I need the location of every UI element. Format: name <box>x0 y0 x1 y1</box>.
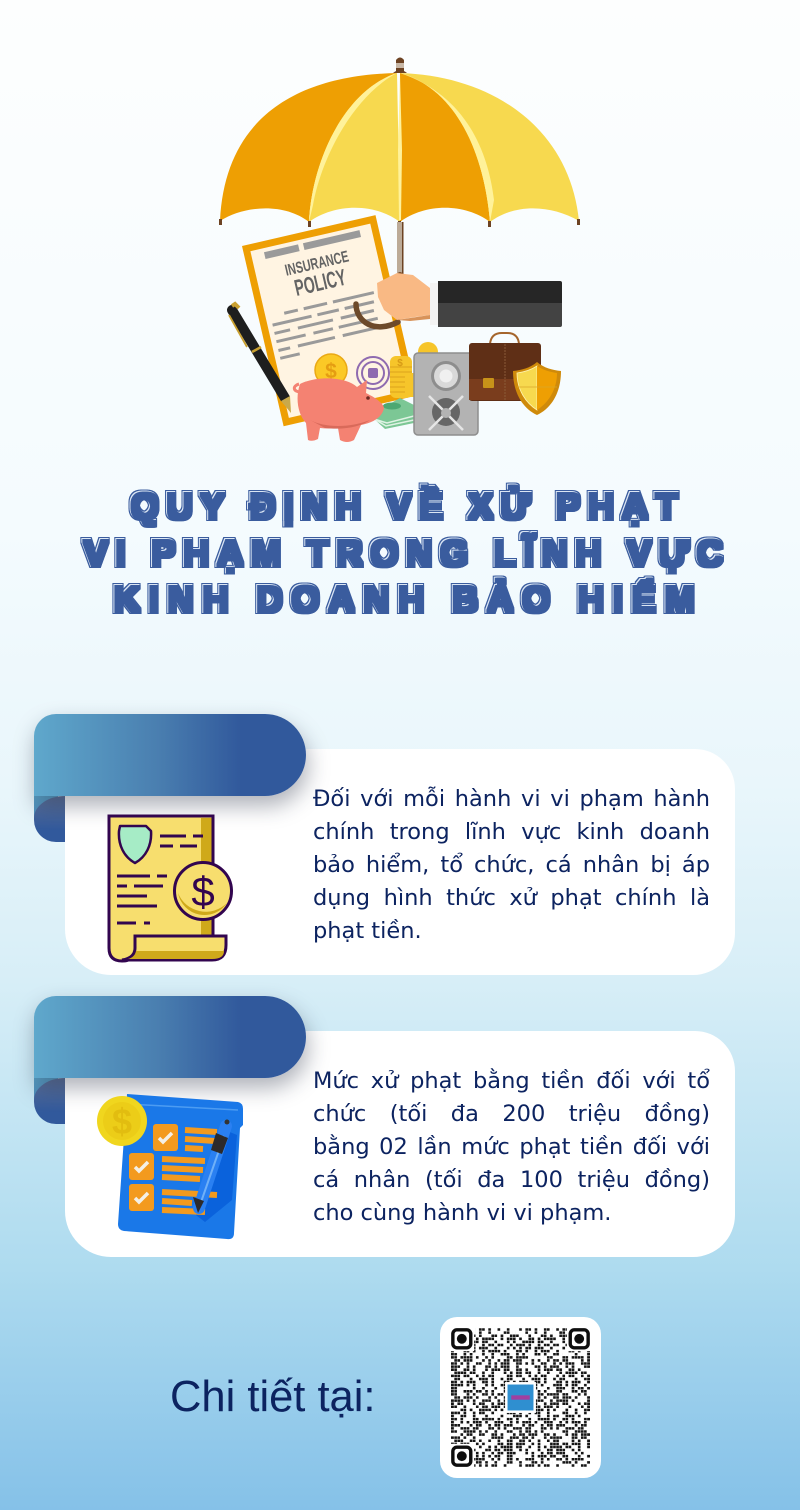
icon: piggy bank with coin <box>294 354 384 442</box>
text block: dụng hình thức xử phạt chính là <box>313 885 710 911</box>
text block: bảo hiểm, tổ chức, cá nhân bị áp <box>313 852 710 878</box>
text: insurance: INSURANCE <box>283 248 351 280</box>
icon: pen <box>229 304 291 413</box>
icon: umbrella canopy <box>219 58 580 227</box>
title: KINH DOANH BẢO HIỂM <box>113 577 694 619</box>
text block: Mức xử phạt bằng tiền đối với tổ <box>313 1068 710 1094</box>
document: insurance policy <box>242 215 417 426</box>
ribbon tail <box>34 794 58 820</box>
QR code <box>451 1328 590 1467</box>
label: details at: Chi tiết tại: <box>170 1373 376 1421</box>
icon: document with shield and dollar coin <box>108 814 233 962</box>
icon: hand and sleeve <box>377 273 562 327</box>
text block: chức (tối đa 200 triệu đồng) <box>313 1101 710 1127</box>
title: VI PHẠM TRONG LĨNH VỰC <box>83 531 722 573</box>
ribbon tail <box>34 1076 58 1102</box>
icon: coin stacks and cash: $ <box>397 358 403 369</box>
icon: briefcase <box>469 333 541 401</box>
text block: phạt tiền. <box>313 918 422 944</box>
icon: shield <box>513 362 561 415</box>
text block <box>313 786 710 944</box>
text: policy: POLICY <box>292 264 348 301</box>
QR code card <box>440 1317 601 1478</box>
icon: document with shield and dollar coin: $ <box>191 868 215 915</box>
text block: chính trong lĩnh vực kinh doanh <box>313 819 710 845</box>
icon: coin stacks and cash <box>370 342 438 429</box>
icon: safe <box>414 353 478 435</box>
panel background <box>65 1031 735 1257</box>
panel: rule 2 <box>23 993 735 1257</box>
title: QUY ĐỊNH VỀ XỬ PHẠT <box>130 484 677 526</box>
text block: bằng 02 lần mức phạt tiền đối với <box>313 1134 710 1160</box>
ribbon <box>34 996 306 1078</box>
title <box>80 482 724 619</box>
text block: Đối với mỗi hành vi vi phạm hành <box>313 786 710 812</box>
ribbon fold <box>34 796 65 842</box>
illustration: umbrella protecting insurance items <box>219 58 580 442</box>
icon: blue checklist with coin and pen: $ <box>112 1101 132 1142</box>
text block <box>313 1068 710 1226</box>
panel background <box>65 749 735 975</box>
panel: rule 1 <box>23 711 735 975</box>
icon: blue checklist with coin and pen <box>97 1094 243 1240</box>
text block: cá nhân (tối đa 100 triệu đồng) <box>313 1167 710 1193</box>
ribbon fold <box>34 1078 65 1124</box>
icon: purple seal <box>357 357 389 389</box>
icon: umbrella pole and hook <box>356 222 404 327</box>
text block: cho cùng hành vi vi phạm. <box>313 1200 611 1226</box>
icon: piggy bank with coin: $ <box>325 360 337 383</box>
ribbon <box>34 714 306 796</box>
